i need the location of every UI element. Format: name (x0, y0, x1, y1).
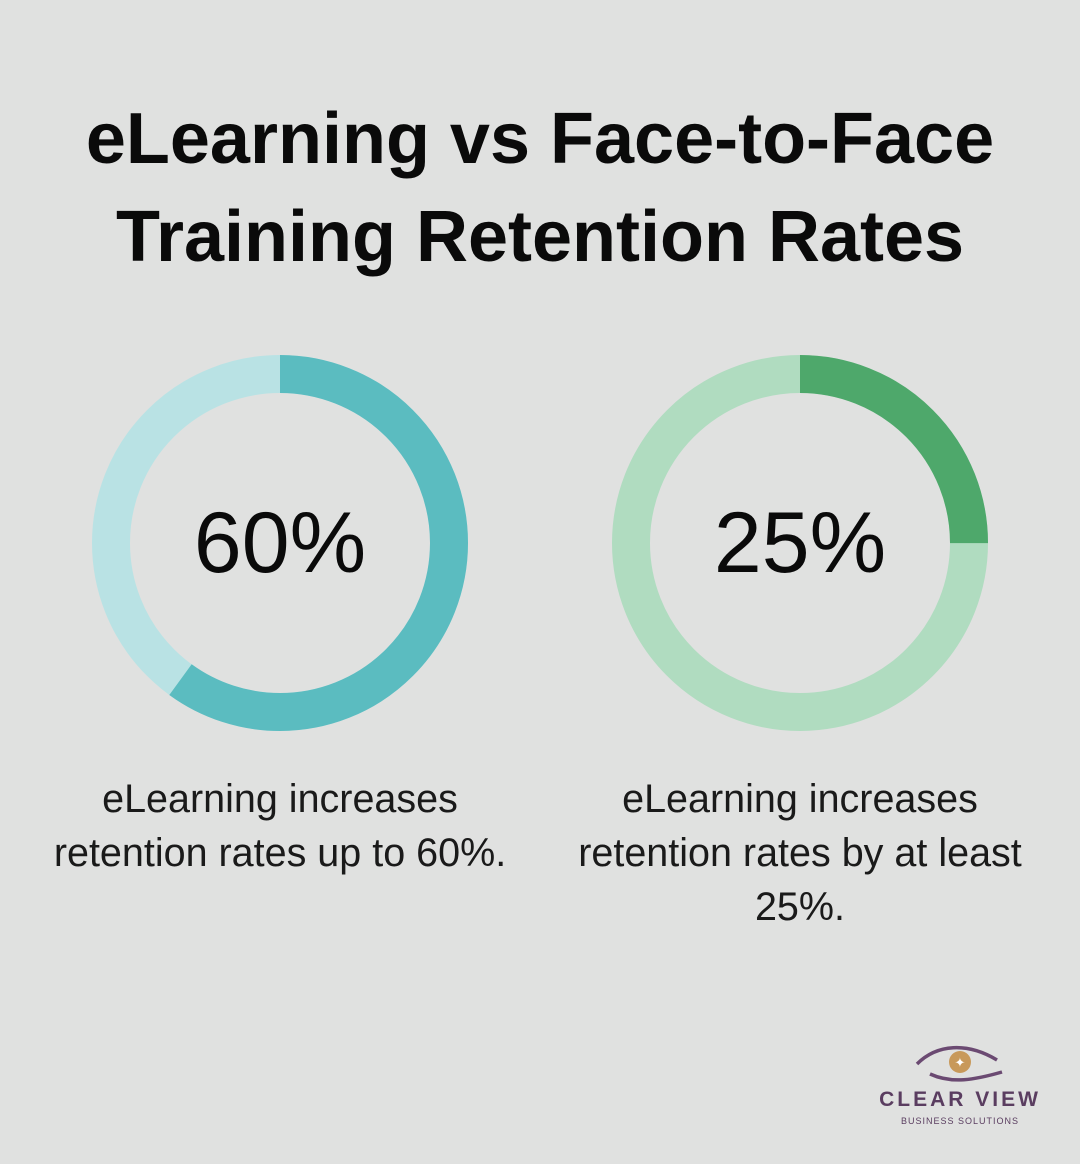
donut chart: 25%: 25% (714, 495, 886, 591)
icon: eye (916, 1046, 1002, 1082)
logo text: CLEAR VIEW (879, 1088, 1041, 1111)
donut chart: 60%: 60% (194, 495, 366, 591)
caption: right: eLearning increases (622, 777, 978, 821)
donut chart: 25% (612, 355, 988, 731)
caption: left: eLearning increases (102, 777, 458, 821)
title: eLearning vs Face-to-Face (86, 99, 994, 179)
title: Training Retention Rates (116, 197, 964, 277)
logo (879, 1046, 1041, 1126)
logo: BUSINESS SOLUTIONS (901, 1116, 1019, 1126)
caption: right (578, 777, 1022, 929)
caption: left (54, 777, 506, 875)
icon: eye: ✦ (955, 1055, 966, 1070)
caption: left: retention rates up to 60%. (54, 831, 506, 875)
donut chart: 60% (92, 355, 468, 731)
title (86, 99, 994, 277)
caption: right: retention rates by at least (578, 831, 1022, 875)
caption: right: 25%. (755, 885, 845, 929)
